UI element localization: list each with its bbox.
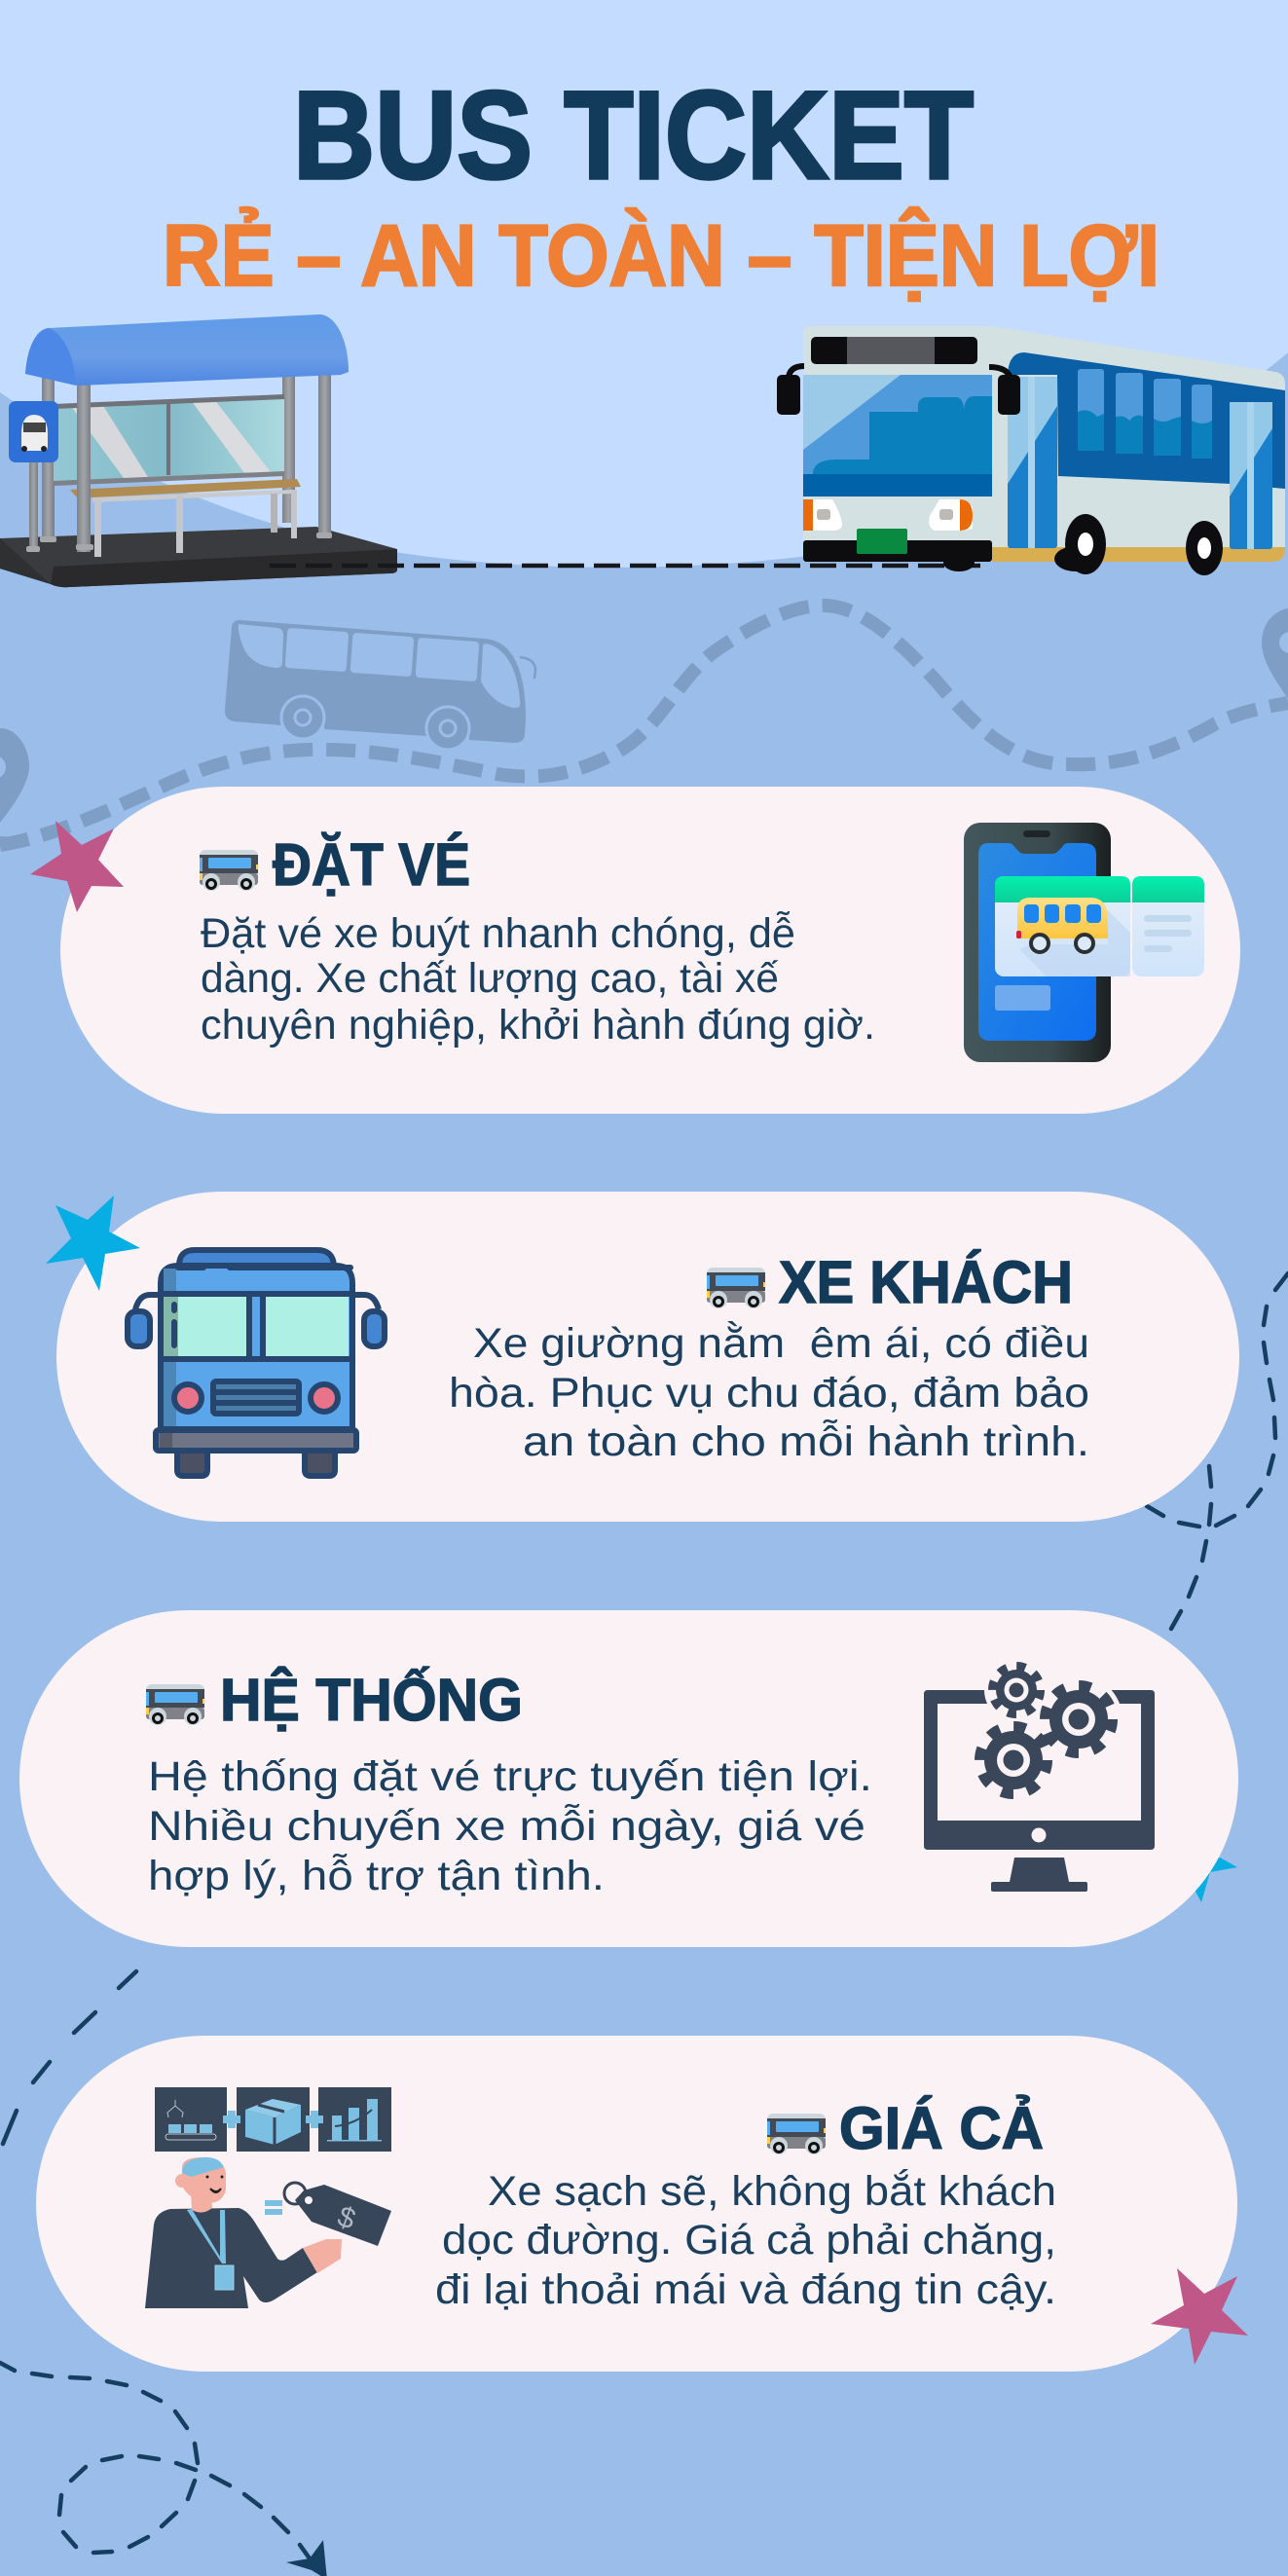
small star behind card 3 — [1168, 1858, 1237, 1902]
text block: hệ thống: hợp lý, hỗ trợ tận tình. — [148, 1853, 605, 1899]
icon: phone with ticket — [964, 823, 1204, 1062]
dashed route left — [3, 1971, 136, 2144]
icon: mini bus — [200, 850, 258, 891]
text block: giá cả: dọc đường. Giá cả phải chăng, — [442, 2217, 1056, 2263]
heading: giá cả: GIÁ CẢ — [839, 2095, 1044, 2161]
text block: xe khách: Xe giường nằm êm ái, có điều — [473, 1320, 1089, 1367]
text block: xe khách — [449, 1320, 1089, 1465]
text block: xe khách: an toàn cho mỗi hành trình. — [523, 1418, 1089, 1465]
panel: đặt vé — [60, 787, 1240, 1114]
text block: giá cả — [435, 2168, 1056, 2313]
text block: đặt vé: Đặt vé xe buýt nhanh chóng, dễ — [201, 910, 795, 957]
star: pink lower — [1151, 2268, 1248, 2365]
star: blue — [46, 1196, 140, 1291]
illustration: pricing person — [145, 2087, 391, 2308]
icon: monitor with gears — [924, 1658, 1155, 1892]
ghost map pin left — [0, 728, 29, 848]
icon: mini bus — [707, 1268, 765, 1308]
text block: đặt vé: chuyên nghiệp, khởi hành đúng giờ. — [201, 1002, 875, 1049]
illustration: pricing person: $ — [333, 2200, 360, 2236]
dashed route bottom loop — [0, 2363, 310, 2558]
text block: hệ thống: Hệ thống đặt vé trực tuyến tiện lợi. — [148, 1753, 872, 1800]
panel: xe khách — [56, 1192, 1239, 1522]
text block: giá cả: đi lại thoải mái và đáng tin cậy. — [435, 2266, 1056, 2313]
text block: hệ thống — [148, 1753, 872, 1899]
dashed ground line — [270, 564, 983, 568]
heading: xe khách: XE KHÁCH — [779, 1249, 1073, 1315]
dashed route upper right — [1147, 1273, 1288, 1629]
text block: đặt vé — [201, 910, 875, 1049]
icon: mini bus — [767, 2114, 826, 2154]
text block: đặt vé: dàng. Xe chất lượng cao, tài xế — [201, 955, 779, 1002]
light sky wave — [0, 0, 1288, 568]
panel: giá cả — [36, 2036, 1237, 2372]
heading: đặt vé: ĐẶT VÉ — [273, 831, 470, 898]
ghost bus silhouette — [225, 620, 535, 750]
heading: hệ thống: HỆ THỐNG — [220, 1667, 523, 1733]
text block: xe khách: hòa. Phục vụ chu đáo, đảm bảo — [449, 1370, 1089, 1417]
ghost map pin right — [1262, 607, 1288, 711]
title: BUS TICKET — [293, 66, 974, 205]
subtitle: RẺ – AN TOÀN – TIỆN LỢI — [163, 206, 1159, 304]
panel: hệ thống — [19, 1610, 1238, 1947]
icon: coach front view — [128, 1250, 385, 1476]
illustration: city bus — [777, 326, 1285, 575]
star: pink upper — [30, 821, 124, 912]
ghost dashed road — [0, 606, 1288, 845]
text block: giá cả: Xe sạch sẽ, không bắt khách — [488, 2168, 1056, 2215]
arrow head — [286, 2540, 327, 2576]
icon: mini bus — [146, 1684, 204, 1725]
text block: hệ thống: Nhiều chuyến xe mỗi ngày, giá vé — [148, 1803, 865, 1850]
illustration: bus shelter — [0, 314, 397, 587]
